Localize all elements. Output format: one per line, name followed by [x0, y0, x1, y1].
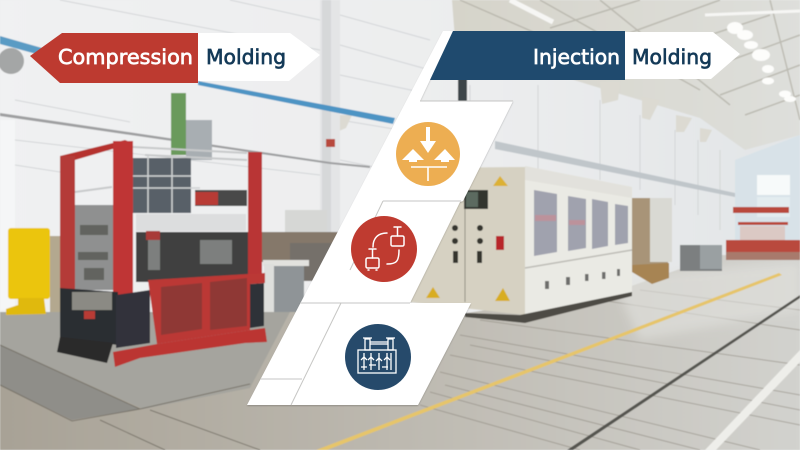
- blue beam: [0, 36, 42, 55]
- column: [320, 0, 340, 300]
- green tower: [171, 93, 186, 155]
- far equipment: [632, 198, 668, 266]
- banner white half: [198, 33, 320, 81]
- label: Compression: Compression: [58, 45, 193, 69]
- banner red half: [30, 33, 198, 83]
- pipe: [0, 113, 370, 168]
- icon: machine schematic: [345, 324, 411, 390]
- sphere: [0, 48, 24, 74]
- red posts: [60, 140, 133, 160]
- wall: [0, 0, 800, 320]
- hanging brackets: [325, 82, 712, 142]
- panel divider lines: [260, 101, 513, 405]
- floor: [0, 255, 800, 450]
- banner white half: [625, 32, 740, 79]
- grey side beam: [495, 141, 735, 197]
- yellow barrel: [8, 228, 50, 299]
- small boxes behind machine: [285, 210, 327, 242]
- back wall right: [735, 135, 800, 260]
- red machine: [57, 140, 267, 367]
- label: Molding (right banner): Molding: [632, 45, 712, 69]
- injection machine: [410, 167, 525, 315]
- base blocks: [60, 288, 118, 345]
- dark column behind banner: [458, 78, 467, 102]
- white chevron panel stack: [247, 31, 513, 405]
- banner: Compression Molding: [30, 33, 320, 83]
- label: Molding (left banner): Molding: [206, 45, 286, 69]
- banner: Injection Molding: [430, 31, 740, 80]
- icon: injection process flow: [351, 216, 417, 282]
- machine feet: [57, 337, 113, 363]
- label: Injection: Injection: [533, 45, 620, 69]
- machine interior: [133, 158, 191, 213]
- floor stripes: [316, 273, 782, 450]
- icon: compression force arrows: [396, 122, 460, 186]
- banner blue half: [430, 31, 625, 80]
- ceiling: [452, 0, 800, 150]
